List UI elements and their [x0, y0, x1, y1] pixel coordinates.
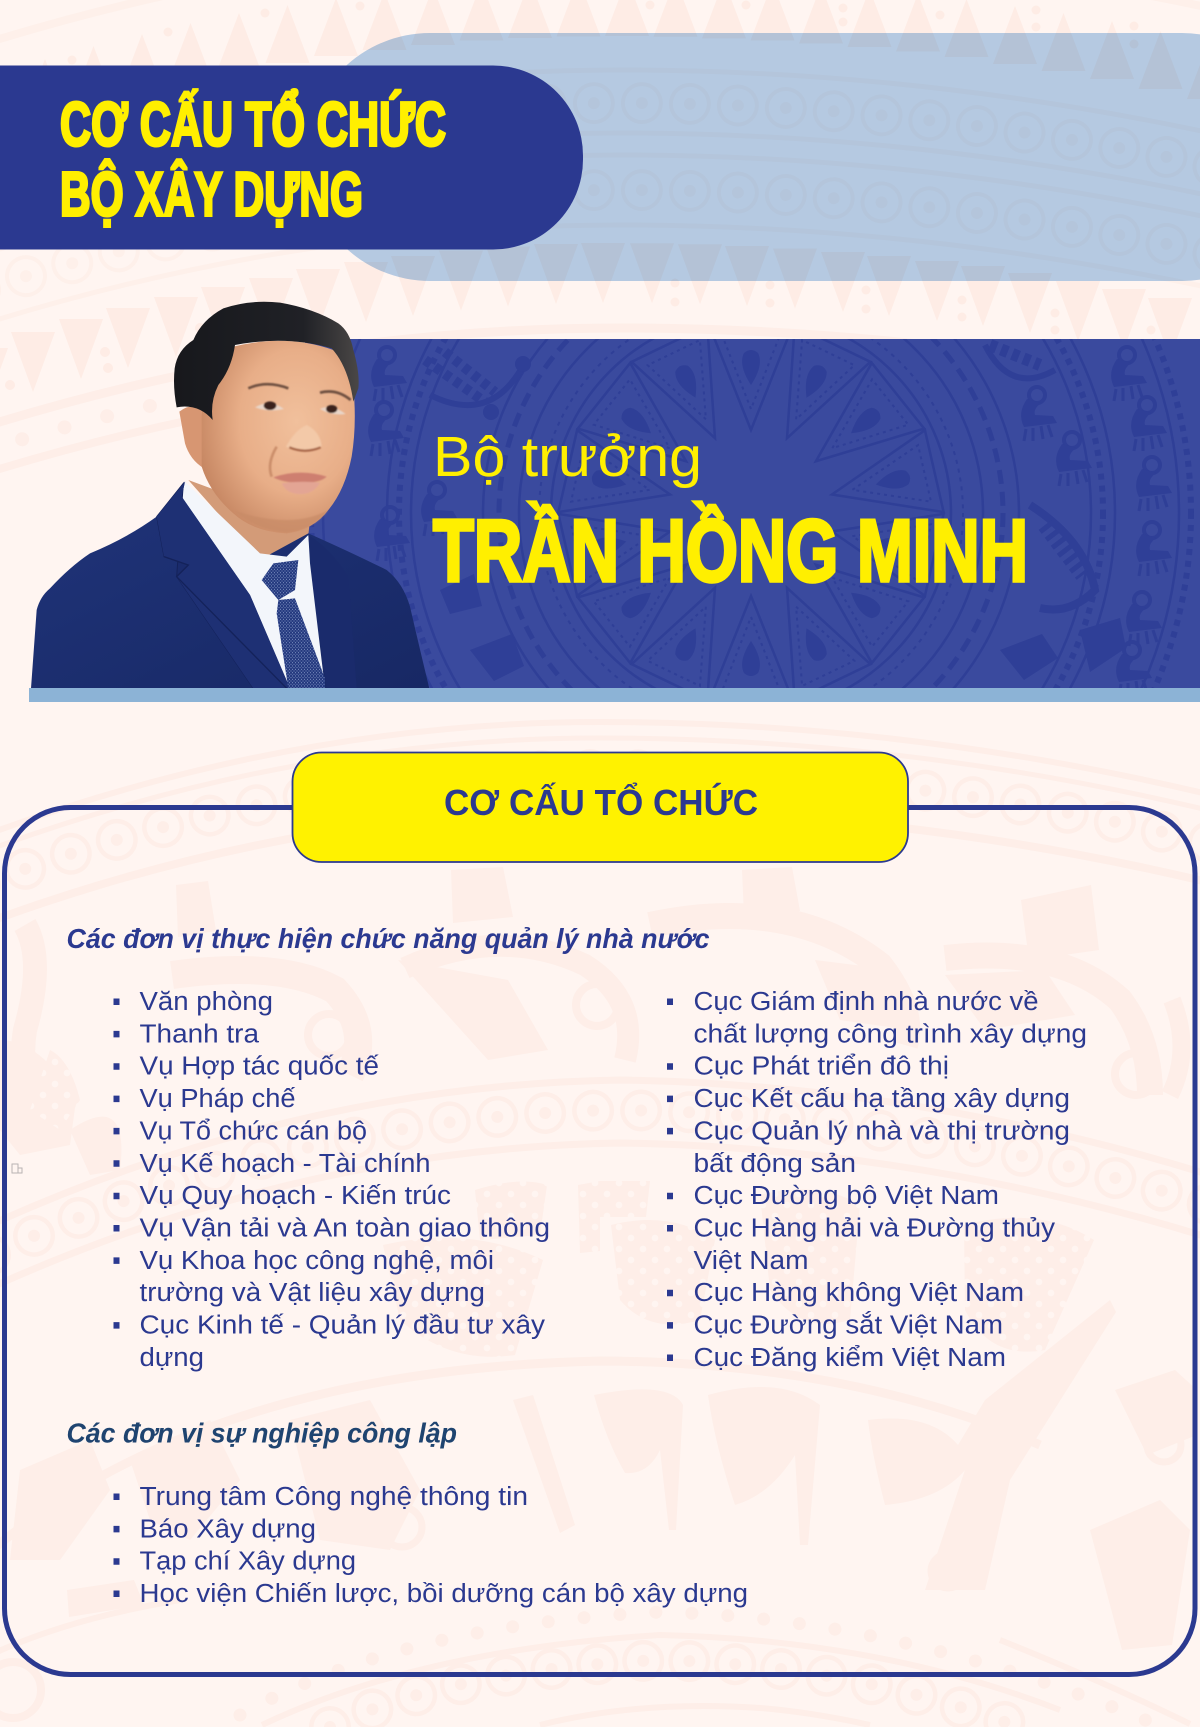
- heading: public service units: Các đơn vị sự nghiệp công lập: [66, 1418, 457, 1448]
- section header: CƠ CẤU TỔ CHỨC: [444, 780, 758, 823]
- list: left column: dựng: [140, 1344, 204, 1372]
- small grey mark at left edge: [12, 1164, 22, 1173]
- list: left column: [114, 988, 550, 1372]
- list: left column: trường và Vật liệu xây dựng: [140, 1279, 485, 1307]
- list: right column: Cục Kết cấu hạ tầng xây dựng: [694, 1085, 1070, 1113]
- list: public service units: Báo Xây dựng: [140, 1515, 316, 1543]
- list: left column: Vụ Kế hoạch - Tài chính: [140, 1150, 430, 1178]
- list: left column: Văn phòng: [140, 988, 273, 1016]
- list: left column: Cục Kinh tế - Quản lý đầu tư xây: [140, 1312, 545, 1340]
- list: left column: Vụ Khoa học công nghệ, môi: [140, 1247, 494, 1275]
- title: two lines: CƠ CẤU TỔ CHỨC: [60, 90, 446, 160]
- top light-blue ribbon: [306, 33, 1200, 281]
- rounded frame: [4, 808, 1195, 1674]
- list: right column: chất lượng công trình xây dựng: [694, 1020, 1087, 1048]
- title pill: [0, 66, 583, 250]
- minister banner with bronze drum motif: [305, 339, 1200, 688]
- list: right column: Cục Hàng hải và Đường thủy: [694, 1214, 1055, 1242]
- list: right column: Cục Quản lý nhà và thị trường: [694, 1117, 1070, 1145]
- list: right column: bất động sản: [694, 1150, 856, 1178]
- rings of the birds: [308, 1014, 350, 1056]
- list: left column: Vụ Tổ chức cán bộ: [140, 1117, 367, 1145]
- list: left column: Vụ Quy hoạch - Kiến trúc: [140, 1182, 451, 1210]
- list: public service units: [114, 1483, 748, 1608]
- list: right column: Việt Nam: [694, 1247, 808, 1275]
- list: left column: Thanh tra: [140, 1020, 260, 1048]
- list: right column: Cục Giám định nhà nước về: [694, 988, 1038, 1016]
- list: right column: Cục Đường bộ Việt Nam: [694, 1182, 999, 1210]
- list: public service units: Trung tâm Công nghệ thông tin: [140, 1483, 528, 1511]
- minister name: TRẦN HỒNG MINH: [433, 501, 1028, 600]
- list: left column: Vụ Hợp tác quốc tế: [140, 1053, 379, 1081]
- list: right column: Cục Hàng không Việt Nam: [694, 1279, 1024, 1307]
- heading: state management units: Các đơn vị thực hiện chức năng quản lý nhà nước: [66, 923, 710, 954]
- list: public service units: Học viện Chiến lược, bồi dưỡng cán bộ xây dựng: [140, 1580, 748, 1608]
- list: right column: Cục Đăng kiểm Việt Nam: [694, 1344, 1006, 1372]
- list: left column: Vụ Pháp chế: [140, 1085, 296, 1113]
- section header: [292, 752, 908, 862]
- light-blue strip under banner: [29, 688, 1200, 702]
- list: right column: [667, 988, 1087, 1372]
- portrait of the minister: [31, 302, 429, 688]
- crescent bands: [172, 970, 358, 1075]
- banner text: [433, 425, 1028, 600]
- minister role: Bộ trưởng: [433, 425, 702, 489]
- list: right column: Cục Phát triển đô thị: [694, 1053, 949, 1081]
- list: right column: Cục Đường sắt Việt Nam: [694, 1311, 1003, 1340]
- title: two lines: [60, 90, 446, 230]
- list: public service units: Tạp chí Xây dựng: [140, 1548, 356, 1576]
- list: left column: Vụ Vận tải và An toàn giao thông: [140, 1214, 550, 1242]
- title: two lines: BỘ XÂY DỰNG: [60, 160, 363, 230]
